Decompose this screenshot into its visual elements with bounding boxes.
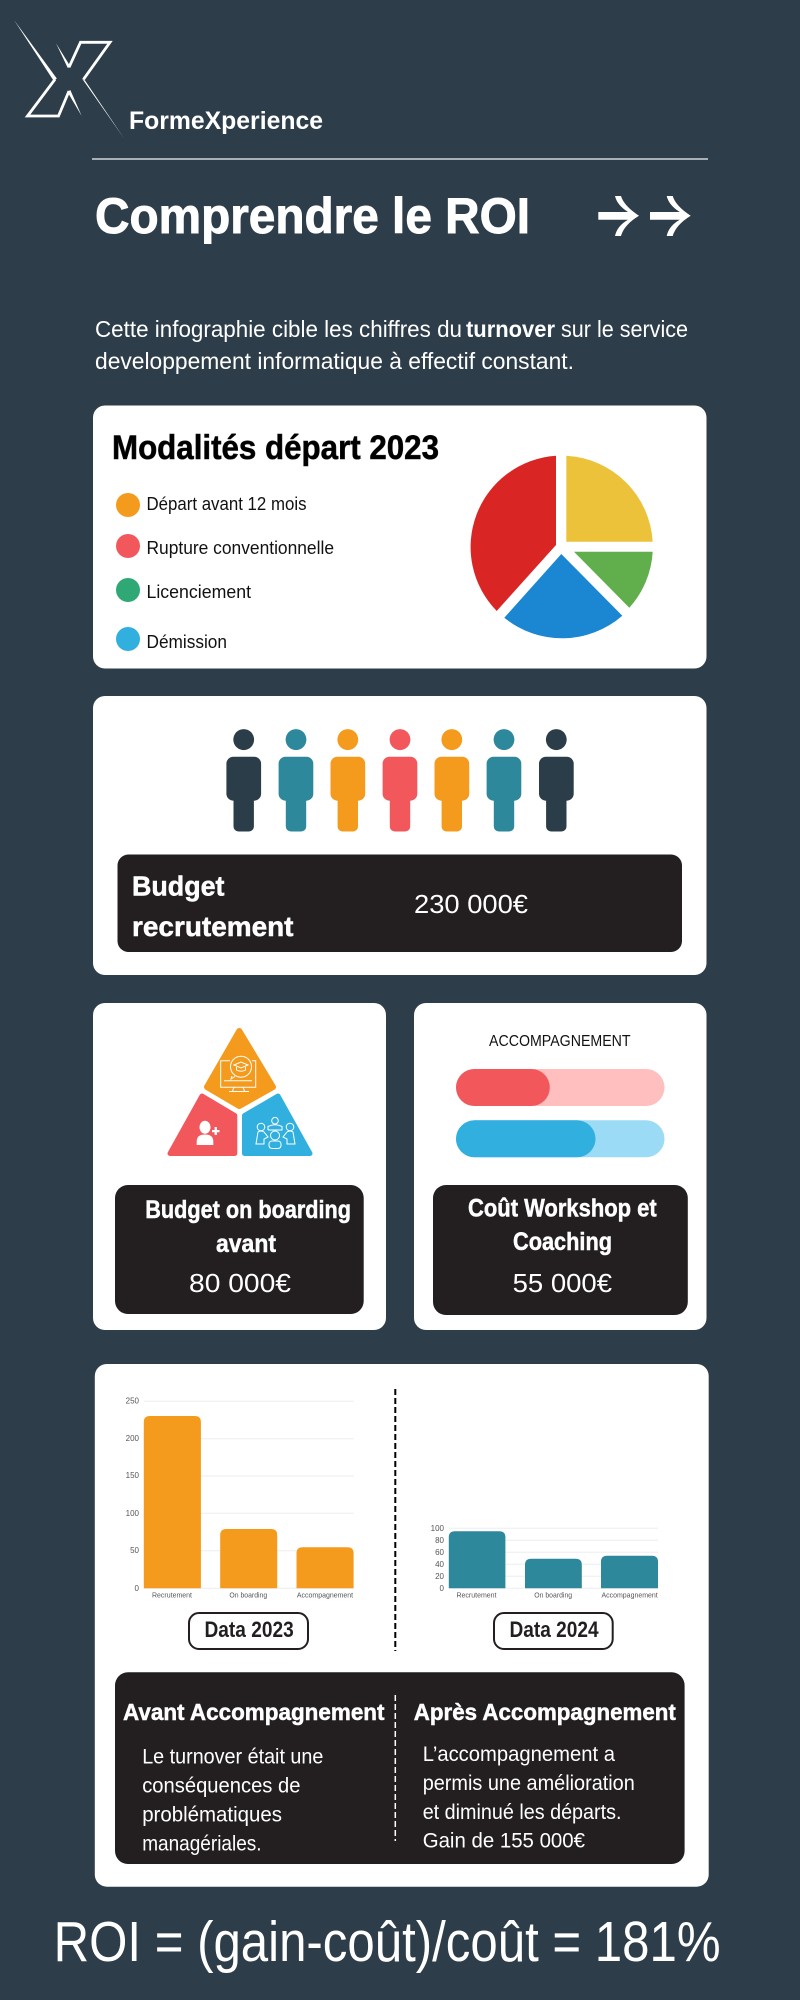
bar chart: data 2023: 0 bbox=[135, 1584, 140, 1593]
cost box: 55 000€ bbox=[513, 1268, 613, 1298]
budget box: 80 000€ bbox=[189, 1268, 292, 1298]
text: après: Après Accompagnement bbox=[414, 1699, 676, 1725]
intro text: Cette infographie cible les chiffres du bbox=[95, 316, 462, 342]
text: avant: problématiques bbox=[142, 1804, 282, 1827]
legend: Départ avant 12 mois bbox=[146, 494, 306, 514]
bar chart: data 2023: 200 bbox=[126, 1434, 140, 1443]
text: avant: managériales. bbox=[142, 1833, 262, 1856]
bar chart: data 2024: Recrutement bbox=[456, 1590, 497, 1600]
text: avant bbox=[123, 1699, 385, 1856]
bar chart: data 2023: 150 bbox=[126, 1471, 140, 1480]
bar chart: data 2023: 100 bbox=[126, 1509, 140, 1518]
bar chart: data 2023: 50 bbox=[130, 1546, 140, 1555]
intro text: developpement informatique à effectif constant. bbox=[95, 348, 574, 374]
cost box bbox=[433, 1185, 688, 1315]
pie chart bbox=[471, 456, 653, 638]
before / after box bbox=[115, 1672, 685, 1864]
logo: FormeXperience bbox=[14, 20, 323, 138]
text: après bbox=[414, 1699, 676, 1853]
bar chart: data 2024: 20 bbox=[435, 1572, 445, 1581]
text: après: L’accompagnement a bbox=[423, 1743, 615, 1766]
text: avant: Le turnover était une bbox=[142, 1745, 323, 1768]
text: après: permis une amélioration bbox=[423, 1772, 635, 1795]
brand name: FormeXperience bbox=[129, 107, 323, 135]
label: data 2023: Data 2023 bbox=[204, 1617, 294, 1642]
text: avant: Avant Accompagnement bbox=[123, 1699, 385, 1725]
bar chart: data 2023: On boarding bbox=[229, 1590, 267, 1600]
text: avant: conséquences de bbox=[142, 1775, 300, 1798]
bar chart: data 2024: 60 bbox=[435, 1548, 445, 1557]
cost box: Coût Workshop et bbox=[468, 1195, 657, 1223]
bar chart: data 2023: 250 bbox=[126, 1396, 140, 1406]
icon: row of people bbox=[226, 729, 574, 832]
text: après: Gain de 155 000€ bbox=[423, 1830, 585, 1853]
icon: monitor with graduation cap bbox=[221, 1056, 256, 1092]
intro text: sur le service bbox=[561, 316, 688, 342]
legend: Démission bbox=[146, 632, 227, 652]
icon: three-part triangle bbox=[170, 1031, 310, 1154]
legend: Licenciement bbox=[146, 582, 251, 602]
legend bbox=[116, 493, 334, 652]
label: data 2023 bbox=[189, 1613, 308, 1649]
budget box: Budget on boarding bbox=[145, 1196, 351, 1224]
cost box: Coaching bbox=[513, 1228, 612, 1256]
bar chart: data 2024: 40 bbox=[435, 1560, 445, 1569]
icon: outlined X bbox=[14, 20, 124, 138]
panel: budget recrutement bbox=[93, 696, 706, 975]
progress bars bbox=[456, 1069, 664, 1157]
bar chart: data 2024: On boarding bbox=[534, 1590, 572, 1600]
budget bar: recrutement bbox=[132, 911, 294, 942]
bar chart: data 2023: Recrutement bbox=[152, 1590, 193, 1600]
label: data 2024: Data 2024 bbox=[510, 1617, 599, 1642]
icon: meeting bbox=[256, 1117, 295, 1148]
bar chart: data 2023 bbox=[126, 1396, 354, 1600]
arrows bbox=[598, 196, 691, 236]
budget box bbox=[115, 1185, 364, 1314]
heading: Modalités départ 2023 bbox=[112, 429, 439, 467]
budget bar bbox=[118, 854, 682, 952]
bar chart: data 2024 bbox=[431, 1524, 659, 1600]
text: après: et diminué les départs. bbox=[423, 1801, 622, 1824]
panel: data comparison bbox=[95, 1364, 709, 1887]
title: Comprendre le ROI bbox=[95, 188, 530, 244]
intro text: turnover bbox=[466, 316, 555, 342]
panel: budget on boarding bbox=[93, 1003, 386, 1330]
bar chart: data 2024: 100 bbox=[431, 1524, 445, 1533]
label: data 2024 bbox=[494, 1613, 613, 1649]
intro text bbox=[95, 316, 688, 374]
panel: modalités de départ bbox=[93, 406, 706, 668]
bar chart: data 2023: Accompagnement bbox=[297, 1590, 354, 1600]
bar chart: data 2024: Accompagnement bbox=[602, 1590, 659, 1600]
budget box: avant bbox=[216, 1230, 277, 1258]
icon: person with plus bbox=[197, 1121, 220, 1145]
bar chart: data 2024: 80 bbox=[435, 1536, 445, 1545]
budget bar: Budget bbox=[132, 870, 224, 902]
label: ACCOMPAGNEMENT bbox=[489, 1033, 631, 1050]
panel: accompagnement bbox=[414, 1003, 706, 1330]
budget bar: 230 000€ bbox=[414, 889, 529, 919]
bar chart: data 2024: 0 bbox=[440, 1584, 445, 1593]
legend: Rupture conventionnelle bbox=[146, 538, 334, 558]
